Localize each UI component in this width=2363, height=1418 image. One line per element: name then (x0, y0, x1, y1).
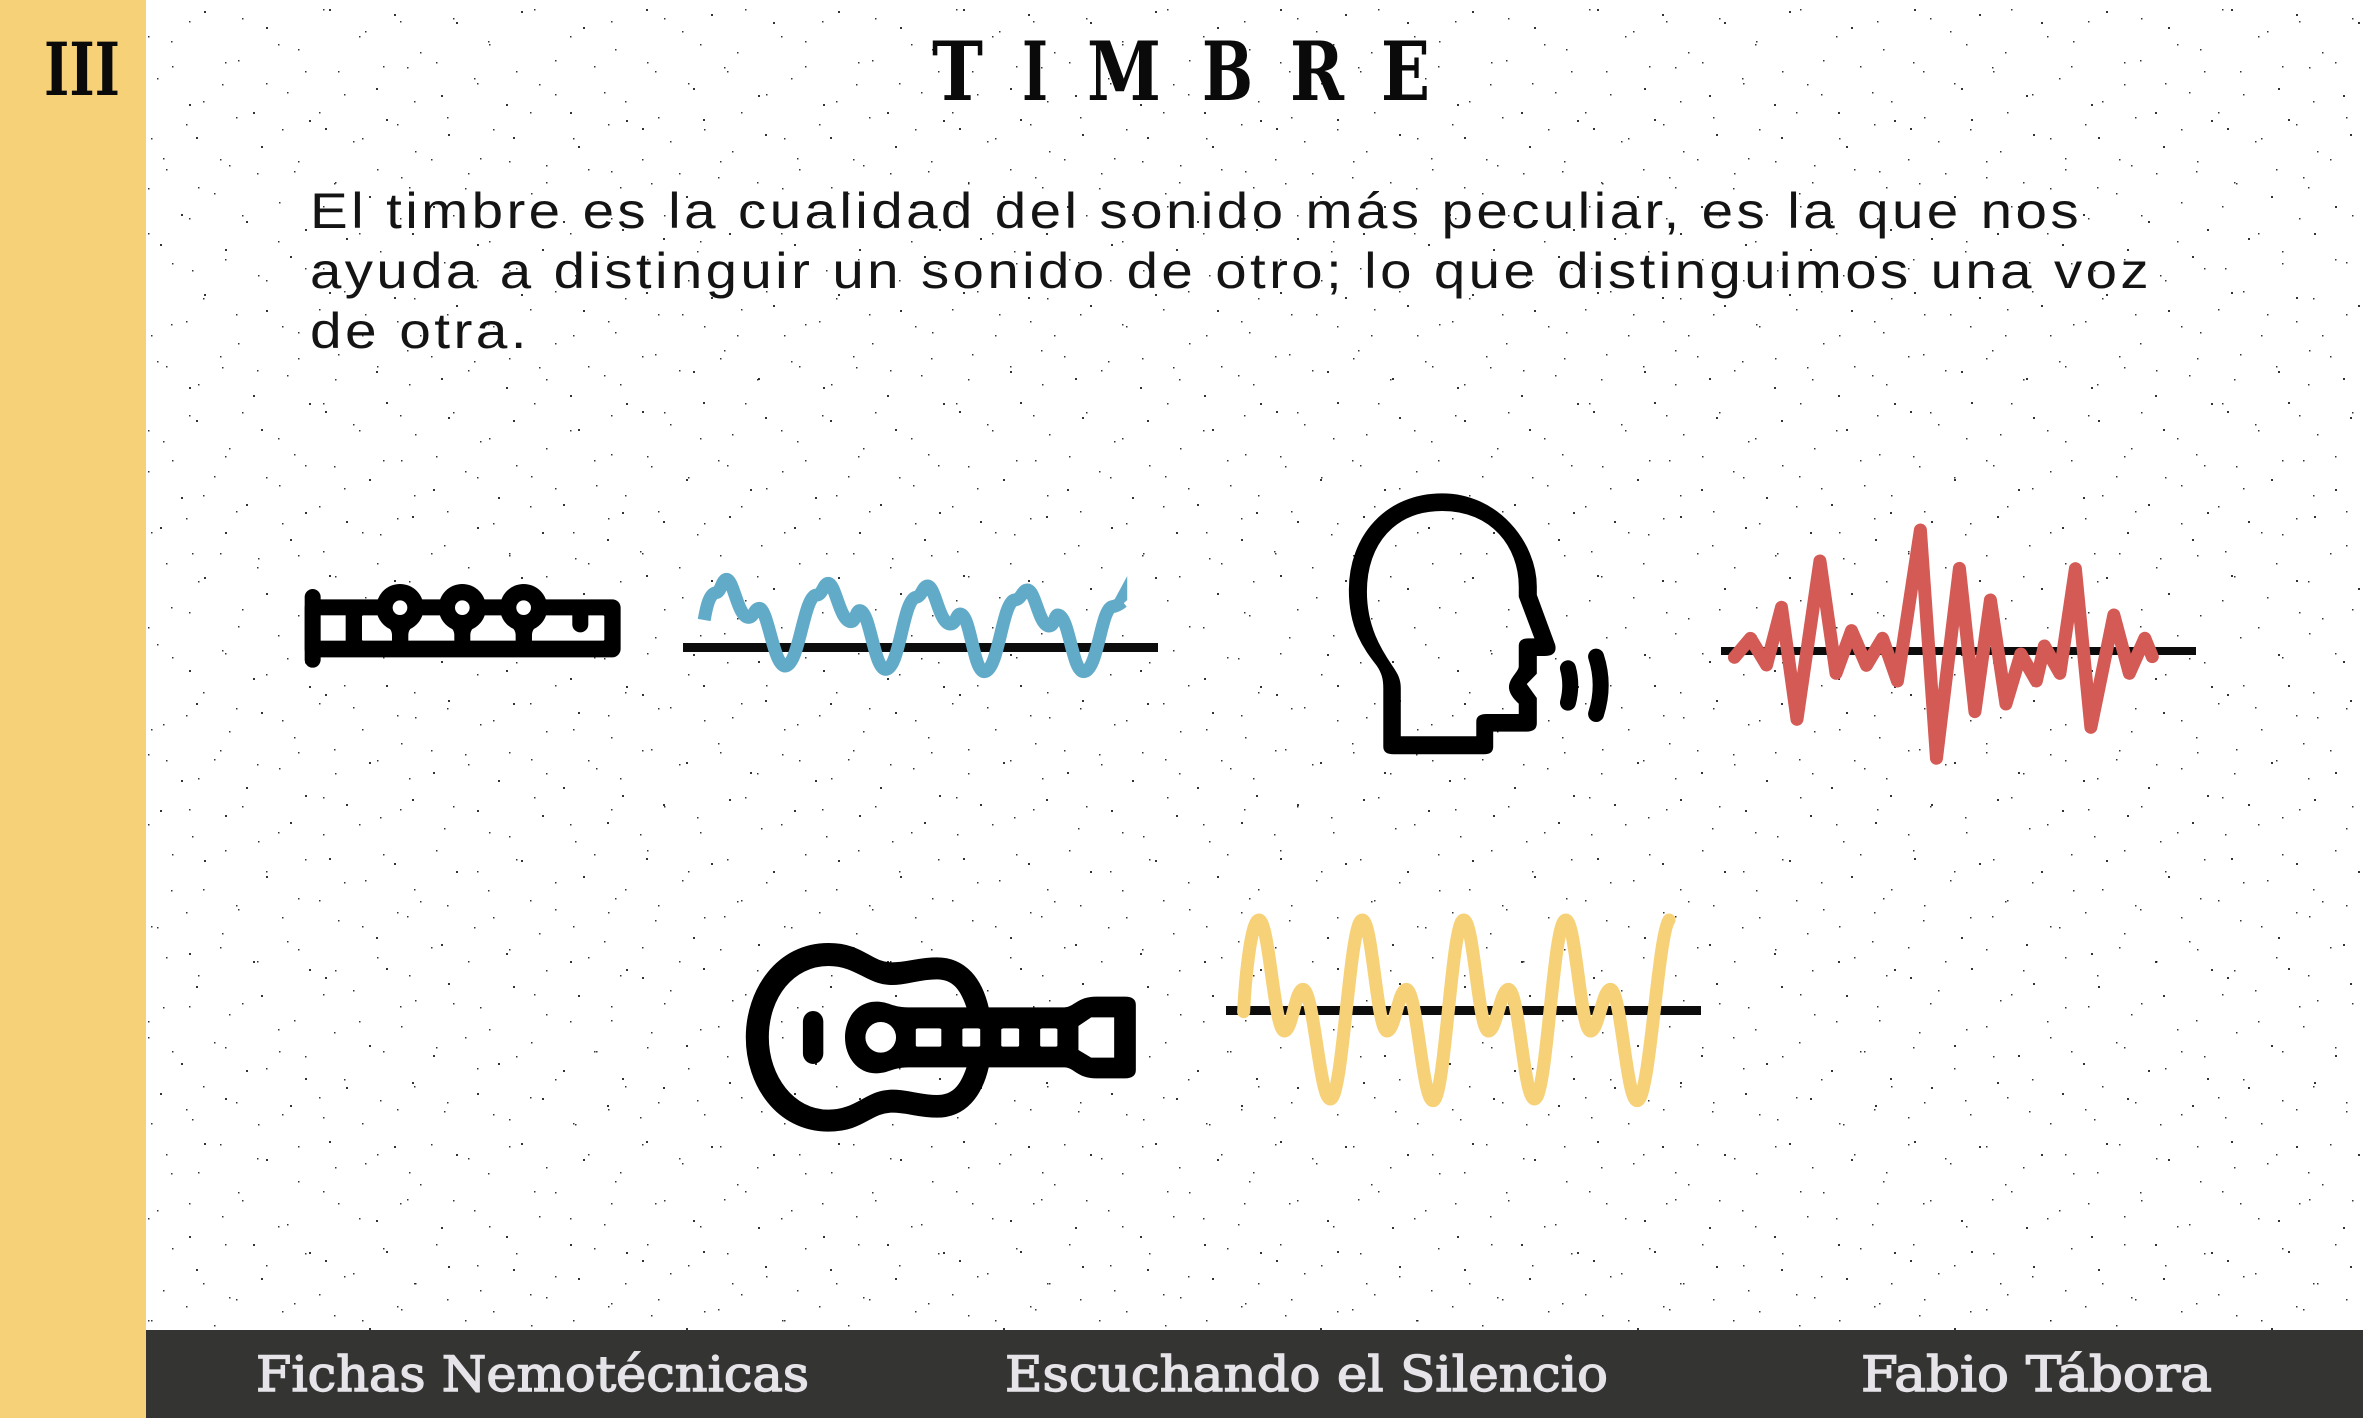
text block: definition (310, 183, 2152, 359)
icon: sound arcs (1568, 657, 1601, 714)
title (932, 25, 1430, 120)
chart: voice waveform (1721, 530, 2196, 758)
title: I (1022, 25, 1048, 120)
icon: guitar (747, 944, 1136, 1131)
icon: speaking head (1350, 494, 1601, 753)
section number: III (44, 27, 120, 113)
title: T (932, 25, 983, 120)
text block: definition: de otra. (310, 303, 530, 359)
text block: definition: ayuda a distinguir un sonido de otro; lo que distinguimos una voz (310, 243, 2152, 299)
footer text: left: Fichas Nemotécnicas (256, 1346, 809, 1403)
text block: definition: El timbre es la cualidad del sonido más peculiar, es la que nos (310, 183, 2082, 239)
chart: guitar waveform (1226, 920, 1701, 1101)
title: M (1087, 25, 1161, 120)
title: E (1381, 25, 1430, 120)
footer text: right: Fabio Tábora (1861, 1346, 2212, 1403)
title: R (1290, 25, 1345, 120)
icon: flute (305, 584, 621, 668)
panel: footer bar (146, 1330, 2363, 1418)
chart: flute waveform (683, 576, 1158, 672)
title: B (1202, 25, 1253, 120)
footer text: center: Escuchando el Silencio (1005, 1346, 1608, 1403)
panel: yellow sidebar (0, 0, 146, 1418)
